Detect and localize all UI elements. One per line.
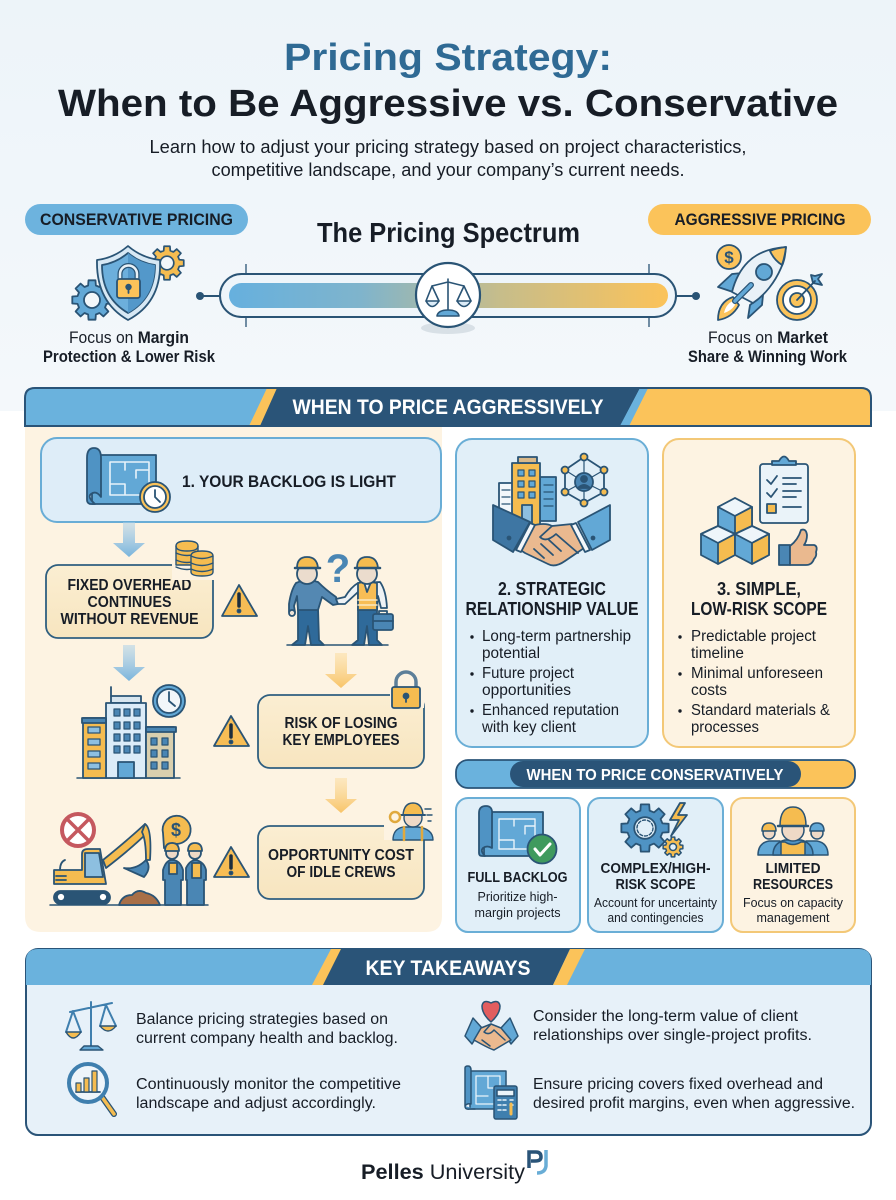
- heading: LOW-RISK SCOPE: [691, 599, 827, 619]
- bullet list: timeline: [691, 645, 744, 662]
- description: [474, 889, 561, 920]
- description: Focus on capacity: [743, 895, 843, 910]
- icon: blueprint and clock: [87, 448, 170, 512]
- step 1 box: 1. YOUR BACKLOG IS LIGHT: [182, 472, 397, 491]
- bullet list: processes: [691, 719, 759, 736]
- heading: [466, 579, 638, 619]
- arrow: [325, 778, 357, 813]
- box: opportunity cost: [258, 803, 433, 899]
- card: limited resources: [731, 798, 855, 932]
- takeaway 4: desired profit margins, even when aggressive.: [533, 1095, 855, 1112]
- takeaway 4: Ensure pricing covers fixed overhead and: [533, 1076, 823, 1093]
- icon: gears and lightning: [621, 803, 687, 857]
- description: margin projects: [474, 905, 561, 920]
- conservative caption: Protection & Lower Risk: [43, 348, 216, 366]
- flow panel: [25, 427, 442, 932]
- arrow: [113, 645, 145, 681]
- section banner: [456, 760, 855, 788]
- section banner: [26, 949, 871, 985]
- icon: scale: [66, 1002, 116, 1050]
- conservative caption: Focus on Margin: [69, 329, 189, 347]
- takeaway 1: [66, 1002, 398, 1050]
- bullet list: with key client: [481, 719, 577, 736]
- box: losing key employees: [258, 672, 424, 768]
- top background: [0, 0, 896, 411]
- conservative pill: CONSERVATIVE PRICING: [40, 210, 233, 229]
- bullet list: opportunities: [482, 682, 571, 699]
- panel: when to price conservatively: [456, 760, 855, 932]
- aggressive pill: [648, 204, 871, 235]
- card: full backlog: FULL BACKLOG: [468, 870, 568, 886]
- aggressive caption: Focus on Market: [708, 329, 828, 347]
- bullet list: Predictable project: [691, 628, 817, 645]
- takeaway 2: relationships over single-project profits.: [533, 1027, 812, 1044]
- box: opportunity cost: OF IDLE CREWS: [286, 864, 396, 881]
- bullet list: Future project: [482, 665, 575, 682]
- arrow: [325, 653, 357, 688]
- icon: warning 3: [214, 847, 249, 877]
- bullet list: [678, 628, 831, 736]
- heading: [600, 861, 711, 893]
- description: and contingencies: [608, 910, 704, 925]
- icon: PJ mark: [529, 1150, 546, 1173]
- aggressive caption: [688, 329, 848, 366]
- heading: LIMITED: [766, 861, 820, 877]
- aggressive pill: AGGRESSIVE PRICING: [674, 210, 846, 229]
- icon: coin stacks: [172, 541, 216, 580]
- bullet list: [470, 628, 631, 736]
- takeaway 2: [465, 1002, 812, 1050]
- heading: [753, 861, 833, 893]
- takeaway 1: Balance pricing strategies based on: [136, 1011, 388, 1028]
- icon: shield with lock and gears: [72, 246, 184, 320]
- title: Pricing Strategy:: [284, 37, 612, 79]
- title: When to Be Aggressive vs. Conservative: [58, 83, 838, 125]
- bullet list: Enhanced reputation: [482, 702, 619, 719]
- icon: workers handshake: ?: [326, 547, 350, 591]
- card: full backlog: [456, 798, 580, 932]
- card: simple low-risk scope: [663, 439, 855, 747]
- section banner: [25, 388, 871, 426]
- section banner: KEY TAKEAWAYS: [366, 957, 530, 980]
- icon: office building and clock: [77, 685, 185, 778]
- subtitle: [150, 136, 746, 180]
- description: Account for uncertainty: [594, 895, 717, 910]
- icon: workers handshake: [287, 547, 393, 645]
- icon: buildings, network and handshake: [493, 454, 610, 565]
- heading: 3. SIMPLE,: [717, 579, 801, 599]
- conservative pill: [25, 204, 248, 235]
- takeaway 3: landscape and adjust accordingly.: [136, 1095, 376, 1112]
- footer logo: [361, 1150, 546, 1184]
- takeaway 2: Consider the long-term value of client: [533, 1008, 799, 1025]
- card: strategic relationship value: [456, 439, 648, 747]
- subtitle: competitive landscape, and your company’s current needs.: [212, 159, 684, 180]
- description: Prioritize high-: [478, 889, 558, 904]
- takeaway 1: current company health and backlog.: [136, 1030, 398, 1047]
- left worker: [289, 557, 338, 645]
- box: losing key employees: KEY EMPLOYEES: [282, 732, 400, 749]
- bullet list: Long-term partnership: [482, 628, 631, 645]
- icon: handshake with heart: [465, 1002, 518, 1050]
- takeaway 4: [465, 1066, 855, 1119]
- icon: magnifier with chart: [69, 1064, 114, 1114]
- heading: RISK SCOPE: [616, 877, 696, 893]
- heading: 2. STRATEGIC: [498, 579, 606, 599]
- aggressive caption: Share & Winning Work: [688, 348, 848, 366]
- title: [58, 37, 838, 125]
- icon: padlock: [392, 672, 420, 708]
- section banner: WHEN TO PRICE AGGRESSIVELY: [292, 396, 604, 419]
- card: complex high-risk scope: [588, 798, 723, 932]
- box: fixed overhead: WITHOUT REVENUE: [60, 611, 198, 628]
- icon: blueprint and calculator: [465, 1066, 517, 1119]
- bullet list: Minimal unforeseen: [691, 665, 823, 682]
- heading: RESOURCES: [753, 877, 833, 893]
- box: fixed overhead: [46, 541, 216, 638]
- icon: rocket target coin: [717, 245, 822, 320]
- box: fixed overhead: CONTINUES: [88, 594, 172, 611]
- conservative caption: [43, 329, 216, 366]
- icon: blueprint with check: [479, 806, 556, 864]
- icon: warning 1: [222, 585, 257, 616]
- takeaway 3: Continuously monitor the competitive: [136, 1076, 401, 1093]
- icon: idle excavator and crew: $: [171, 820, 181, 840]
- icon: clipboard, cubes and thumbs up: [701, 456, 817, 565]
- box: opportunity cost: OPPORTUNITY COST: [268, 847, 414, 864]
- icon: idle excavator and crew: [50, 814, 208, 905]
- ground: [287, 644, 388, 646]
- box: losing key employees: RISK OF LOSING: [284, 715, 398, 732]
- bullet list: potential: [482, 645, 540, 662]
- heading: RELATIONSHIP VALUE: [466, 599, 638, 619]
- subtitle: Learn how to adjust your pricing strategy based on project characteristics,: [150, 136, 746, 157]
- description: [743, 895, 843, 925]
- heading: [691, 579, 827, 619]
- spectrum slider: [196, 263, 700, 334]
- icon: warning 2: [214, 716, 249, 746]
- bullet list: Standard materials &: [691, 702, 831, 719]
- icon: rocket target coin: $: [724, 248, 734, 267]
- arrow: [113, 522, 145, 557]
- step 1 box: [41, 438, 441, 522]
- panel: key takeaways: [26, 949, 871, 1135]
- description: [594, 895, 717, 925]
- box: fixed overhead: FIXED OVERHEAD: [68, 577, 192, 594]
- panel: pricing spectrum: [25, 204, 871, 366]
- panel: when to price aggressively: [25, 388, 871, 932]
- icon: idle worker: [390, 803, 433, 840]
- bullet list: costs: [691, 682, 727, 699]
- section banner: WHEN TO PRICE CONSERVATIVELY: [526, 767, 784, 784]
- spectrum heading: The Pricing Spectrum: [317, 217, 580, 248]
- icon: balance scale: [416, 263, 480, 327]
- description: management: [756, 910, 830, 925]
- heading: COMPLEX/HIGH-: [600, 861, 711, 877]
- footer logo: Pelles University: [361, 1161, 526, 1184]
- takeaway 3: [69, 1064, 401, 1114]
- icon: three workers: [758, 807, 828, 855]
- right worker: [336, 557, 393, 645]
